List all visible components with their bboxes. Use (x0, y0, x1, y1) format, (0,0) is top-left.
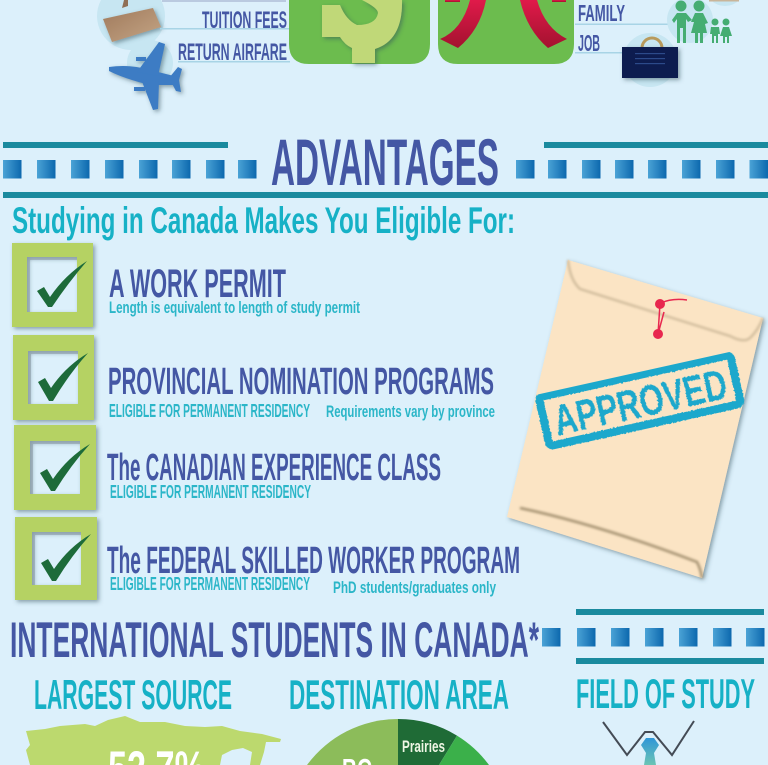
pie chart: destination area (307, 719, 489, 765)
icon: dollar sign (322, 0, 402, 63)
label: cost line clipped at the top (162, 0, 286, 2)
pie label: prairies: Prairies (402, 737, 445, 756)
panel: ribbon tile (438, 0, 574, 64)
envelope bottom fold (520, 508, 702, 578)
item: provincial nomination programs: ELIGIBLE FOR PERMANENT RESIDENCY (109, 401, 310, 421)
item: federal skilled worker program: PhD students/graduates only (333, 578, 496, 597)
label: tuition fees (160, 7, 290, 34)
icon: briefcase (622, 33, 678, 87)
item: provincial nomination programs: Requirements vary by province (326, 402, 495, 421)
label: tuition fees: TUITION FEES (202, 7, 287, 34)
checkbox: provincial nomination (13, 335, 94, 420)
item: canadian experience class: ELIGIBLE FOR PERMANENT RESIDENCY (110, 482, 311, 502)
label: family: FAMILY (578, 0, 625, 26)
icon: suitcase (97, 0, 165, 50)
item: canadian experience class (107, 447, 441, 502)
checkbox: canadian experience (14, 425, 96, 510)
icon: corner badge (709, 0, 739, 6)
icon: collar and tie (603, 721, 694, 765)
item: work permit: A WORK PERMIT (109, 262, 286, 306)
label: return airfare: RETURN AIRFARE (178, 39, 287, 66)
item: federal skilled worker program: ELIGIBLE FOR PERMANENT RESIDENCY (110, 574, 310, 594)
title: ADVANTAGES (271, 125, 499, 199)
envelope string tie (654, 299, 687, 338)
label: return airfare (178, 39, 290, 66)
item: federal skilled worker program (107, 540, 520, 597)
icon: ribbon (440, 0, 567, 48)
item: work permit: Length is equivalent to length of study permit (109, 298, 360, 317)
item: provincial nomination programs (108, 361, 495, 421)
panel: dollar tile (289, 0, 430, 64)
section header: advantages (3, 125, 768, 199)
envelope flap shadow (568, 260, 763, 340)
label: job: JOB (578, 30, 600, 56)
map: largest source (26, 716, 281, 765)
icon: approved envelope (507, 260, 763, 578)
item: canadian experience class: The CANADIAN EXPERIENCE CLASS (107, 447, 441, 489)
checkbox: federal skilled worker (15, 517, 97, 600)
checkbox: work permit (12, 243, 93, 327)
icon: family (667, 0, 732, 43)
item: work permit (109, 262, 360, 317)
subheading: Studying in Canada Makes You Eligible For: (12, 200, 515, 241)
heading: largest source: LARGEST SOURCE (34, 671, 232, 718)
heading: destination area: DESTINATION AREA (289, 671, 509, 718)
icon: airplane (109, 40, 182, 110)
